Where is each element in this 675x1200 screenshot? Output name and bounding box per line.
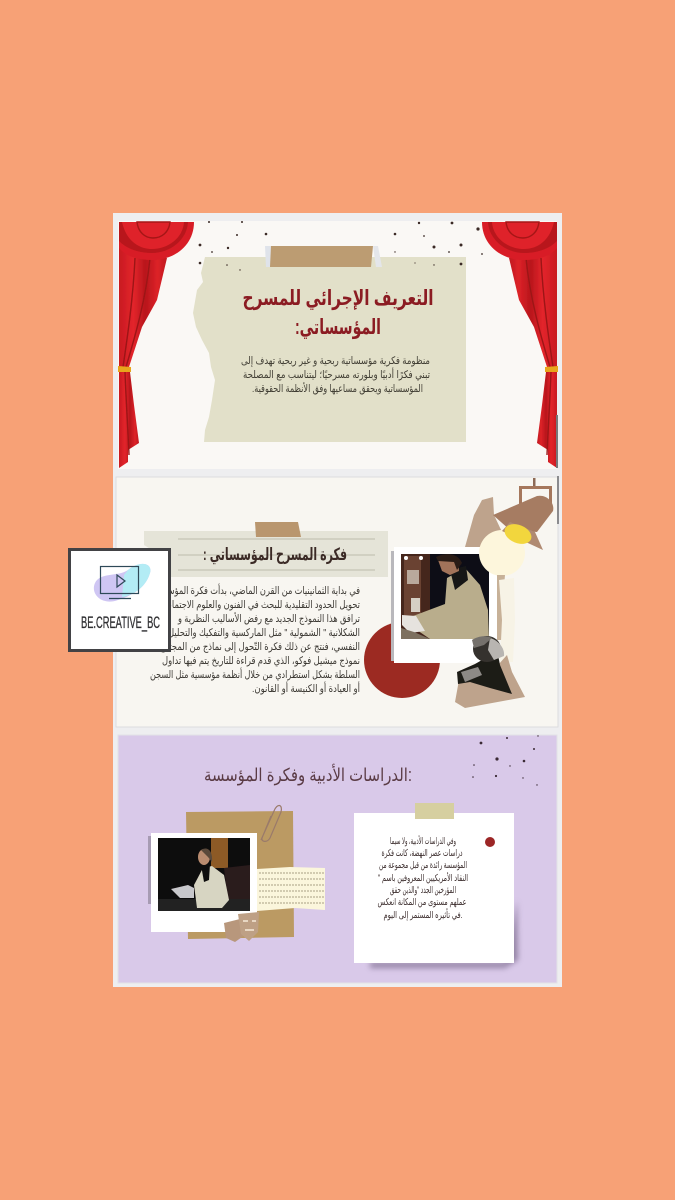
- icon: spotlight: [493, 478, 553, 550]
- bullet: [485, 837, 495, 847]
- icon: left curtain: [118, 222, 194, 468]
- body text: [150, 583, 360, 695]
- body text: في بداية الثمانينيات من القرن الماضي، بدأت فكرة المؤسسة: [156, 583, 360, 597]
- definition text: تبني فكرًا أدبيًا وبلورته مسرحيًا؛ ليتناسب مع المصلحة: [243, 367, 430, 381]
- paperclip: [261, 805, 281, 841]
- paint splatter: [199, 221, 483, 271]
- brand name: BE.CREATIVE_BC: [81, 614, 160, 632]
- definition text: منظومة فكرية مؤسساتية ربحية و غير ربحية تهدف إلى: [241, 355, 430, 367]
- icon: theatre masks: [224, 912, 259, 942]
- torn kraft upper: [465, 497, 502, 547]
- polaroid: [391, 547, 497, 663]
- scrollbar sliver: [557, 476, 559, 524]
- definition text: [241, 355, 430, 395]
- slide frame: [113, 213, 562, 987]
- panel: operational definition: [118, 221, 558, 469]
- photo: man on stage: [158, 838, 250, 911]
- torn paper card: [193, 257, 466, 442]
- body text: تحويل الحدود التقليدية للبحث في الفنون والعلوم الاجتماعية: [160, 599, 360, 611]
- splatter: [472, 735, 539, 786]
- title: [242, 287, 434, 339]
- icon: right curtain: [482, 222, 558, 468]
- body text: الشكلانية " الشمولية " مثل الماركسية والتفكيك والتحليل: [168, 627, 360, 639]
- tape: [415, 803, 454, 819]
- logo badge: [70, 550, 170, 650]
- note text: المؤرخين الجدد "والذين حقق: [390, 885, 456, 896]
- body text: السلطة بشكل استطرادي من خلال أنظمة مؤسسية مثل السجن: [150, 667, 360, 681]
- icon: video screen: [94, 564, 150, 602]
- torn paper strip: [497, 575, 510, 640]
- title: المؤسساتي:: [295, 316, 381, 339]
- heading band: [144, 522, 388, 577]
- body text: نموذج ميشيل فوكو، الذي قدم قراءة للتاريخ يتم فيها تداول: [162, 655, 360, 667]
- heading: :الدراسات الأدبية وفكرة المؤسسة: [204, 764, 412, 786]
- definition text: المؤسساتية ويحقق مساعيها وفق الأنظمة الحقوقية.: [252, 382, 423, 395]
- note card: [354, 803, 518, 968]
- statue: [457, 636, 512, 694]
- splatter over card: [226, 262, 462, 271]
- title: التعريف الإجرائي للمسرح: [242, 287, 434, 310]
- note text: [378, 835, 468, 921]
- torn note: [257, 867, 325, 911]
- heading: فكرة المسرح المؤسساتي :: [203, 545, 347, 565]
- note text: دراسات عصر النهضة، كانت فكرة: [382, 848, 462, 859]
- collage: spotlight and photo: [364, 478, 553, 708]
- polaroid: [148, 833, 257, 932]
- note text: عملهم مستوى من المكانة انعكس: [378, 897, 466, 908]
- body text: أو العيادة أو الكنيسة أو القانون.: [252, 681, 360, 695]
- kraft lower: [455, 655, 525, 708]
- panel: concept of institutional theatre: [116, 476, 559, 727]
- panel: literary studies: [118, 735, 557, 983]
- collage: actor photo: [148, 805, 325, 942]
- tape: [265, 246, 382, 267]
- red circle: [364, 622, 440, 698]
- note text: المؤسسة رائدة من قبل مجموعة من: [379, 860, 467, 871]
- note text: .في تأثيره المستمر إلى اليوم: [384, 908, 462, 921]
- scrollbar sliver: [556, 415, 558, 468]
- photo: man reading: [401, 554, 489, 639]
- kraft paper: [186, 811, 294, 939]
- body text: النفسي، فنتج عن ذلك فكرة التّحول إلى نماذج من المجتمع: [160, 641, 360, 653]
- note text: وفي الدراسات الأدبية، ولا سيما: [390, 835, 456, 847]
- note text: النقاد الأمريكيين المعروفين باسم ": [378, 872, 468, 884]
- light glow: [479, 530, 525, 576]
- body text: ترافق هذا النموذج الجديد مع رفض الأساليب النظرية و: [177, 612, 360, 625]
